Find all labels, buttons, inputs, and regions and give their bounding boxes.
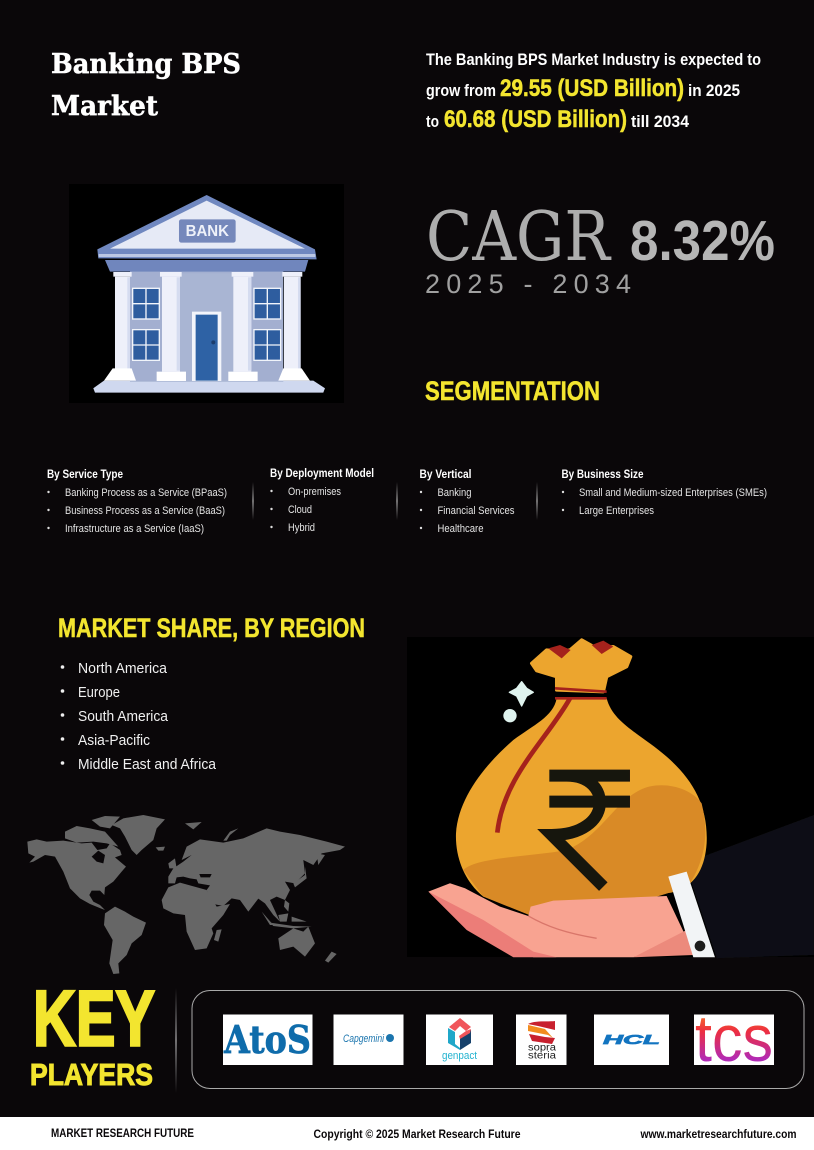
logo: sopra steria: sopra — [528, 1042, 556, 1054]
segment: by business size: Large Enterprises — [579, 505, 654, 517]
market growth statement: grow from — [426, 81, 496, 100]
logo: sopra steria — [516, 1014, 566, 1065]
icon: money bag on hand — [407, 637, 814, 958]
logo: genpact: genpact — [442, 1050, 477, 1062]
logo: HCL — [594, 1014, 669, 1065]
heading: key players: PLAYERS — [30, 1057, 153, 1092]
title: Market — [51, 91, 159, 122]
market growth statement: in 2025 — [688, 81, 740, 100]
segment: by vertical: Financial Services — [438, 505, 515, 517]
CAGR figure: 8.32% — [630, 209, 775, 273]
CAGR figure — [425, 198, 775, 299]
segment: by vertical: Healthcare — [438, 523, 484, 535]
CAGR figure: CAGR — [426, 198, 612, 277]
CAGR figure: 2025 - 2034 — [425, 269, 631, 299]
segment: by business size: By Business Size — [562, 467, 644, 481]
heading: key players: KEY — [33, 974, 155, 1062]
segment: by service type — [47, 467, 227, 535]
sparkles — [509, 682, 533, 706]
title — [51, 49, 241, 122]
heading: market share by region: MARKET SHARE, BY REGION — [58, 613, 365, 643]
market growth statement: 29.55 (USD Billion) — [500, 75, 684, 102]
segment: by business size: Small and Medium-sized Enterprises (SMEs) — [579, 487, 767, 499]
heading: key players — [30, 974, 155, 1092]
footer bar — [0, 1117, 814, 1150]
bag body — [456, 698, 707, 897]
rupee symbol — [549, 776, 630, 887]
market growth statement: till 2034 — [631, 112, 690, 131]
segment: by deployment model: On-premises — [288, 486, 341, 498]
icon: bank building — [69, 184, 344, 403]
logo: Capgemini: Capgemini — [343, 1033, 384, 1045]
segment: by service type: By Service Type — [47, 467, 123, 481]
logo: Capgemini — [334, 1014, 404, 1065]
logo: HCL: HCL — [603, 1033, 660, 1047]
region list: North America — [78, 660, 168, 677]
segment: by vertical: By Vertical — [420, 467, 472, 481]
segment: by vertical: Banking — [438, 487, 472, 499]
segment: by deployment model: Hybrid — [288, 522, 315, 534]
jacket sleeve — [685, 815, 814, 958]
region list: Middle East and Africa — [78, 756, 217, 773]
title: Banking BPS — [51, 49, 241, 80]
region list: South America — [78, 708, 169, 725]
market growth statement — [426, 50, 761, 133]
region list — [61, 660, 217, 773]
icon: bank building: BANK — [186, 223, 229, 240]
hand — [428, 883, 687, 957]
heading: segmentation: SEGMENTATION — [425, 376, 600, 406]
logo: Atos: AtoS — [223, 1017, 311, 1062]
segment: by deployment model: By Deployment Model — [270, 466, 374, 480]
segment: by service type: Banking Process as a Service (BPaaS) — [65, 487, 227, 499]
segment: by deployment model — [270, 466, 374, 534]
market growth statement: 60.68 (USD Billion) — [444, 106, 627, 133]
region list: Europe — [78, 684, 120, 701]
segment: by vertical — [420, 467, 515, 535]
logo: genpact — [426, 1014, 493, 1065]
shirt cuff — [668, 872, 715, 957]
segment: by service type: Infrastructure as a Service (IaaS) — [65, 523, 204, 535]
logo: TCS: tcs — [695, 1001, 773, 1075]
segment: by deployment model: Cloud — [288, 504, 312, 516]
world map — [27, 815, 345, 974]
market growth statement: to — [426, 112, 439, 131]
panel: company logos — [192, 990, 804, 1088]
logo: sopra steria: steria — [528, 1050, 557, 1062]
footer bar: MARKET RESEARCH FUTURE — [51, 1126, 194, 1140]
segment: by service type: Business Process as a Service (BaaS) — [65, 505, 225, 517]
market growth statement: The Banking BPS Market Industry is expected to — [426, 50, 761, 69]
segment: by business size — [562, 467, 767, 517]
region list: Asia-Pacific — [78, 732, 150, 749]
footer bar: Copyright © 2025 Market Research Future — [314, 1127, 521, 1141]
